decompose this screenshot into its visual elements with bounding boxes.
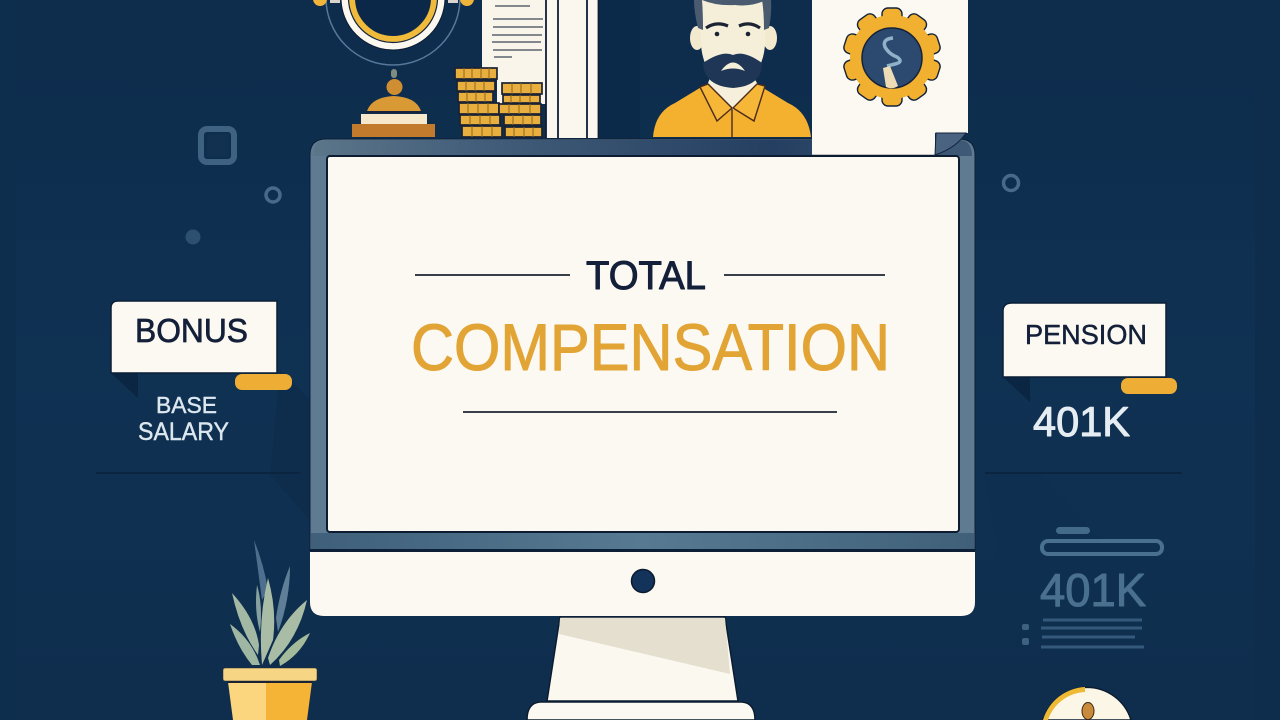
icon: globe: [313, 0, 474, 65]
icon: potted plant: [223, 540, 317, 720]
monitor bezel: [310, 139, 975, 550]
card: bonus: BONUS: [135, 312, 248, 349]
card: bonus: [111, 301, 292, 398]
monitor chin: [310, 552, 975, 616]
label: base salary: [138, 392, 229, 446]
heading: total: TOTAL: [586, 254, 706, 298]
paper with gear: [812, 0, 968, 156]
label: base salary: BASE: [156, 392, 217, 418]
document and pillars: [482, 0, 599, 138]
icon: gear with S: [842, 8, 942, 106]
card: pension: [1003, 303, 1177, 402]
monitor power dot: [632, 570, 654, 592]
icon: faded square: [201, 129, 234, 162]
faded 401k panel: 401K: [1040, 564, 1146, 616]
icon: faded ring right: [1004, 176, 1018, 190]
monitor screen: [327, 156, 959, 532]
icon: gauge dial: [1043, 687, 1131, 720]
icon: faded ring left: [266, 188, 280, 202]
title: [411, 254, 890, 384]
heading: compensation: COMPENSATION: [411, 310, 890, 384]
card: pension: PENSION: [1025, 319, 1147, 350]
label: base salary: SALARY: [138, 418, 229, 446]
faded 401k panel: [1022, 527, 1162, 647]
icon: faded dot: [186, 230, 200, 244]
monitor: [310, 139, 975, 720]
monitor stand: [527, 617, 755, 720]
label: 401k: 401K: [1033, 398, 1130, 445]
icon: coin stacks: [455, 68, 542, 137]
icon: service bell: [352, 69, 435, 137]
icon: bearded person: [653, 0, 811, 137]
